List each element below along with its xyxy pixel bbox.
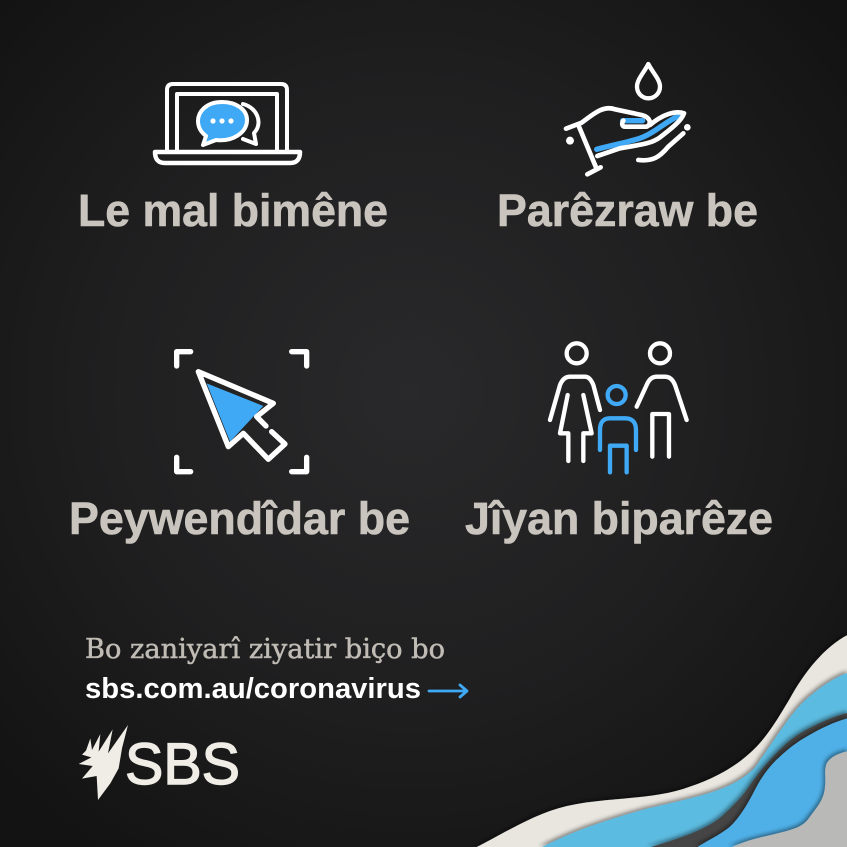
heading: Peywendîdar be: Peywendîdar be (69, 493, 410, 544)
icon: hand under water drop (566, 64, 691, 174)
logo: SBS (79, 725, 240, 800)
heading: Parêzraw be: Parêzraw be (497, 185, 758, 236)
heading: Le mal bimêne: Le mal bimêne (78, 185, 388, 236)
logo: SBS: SBS (125, 732, 240, 797)
icon: cursor arrow in focus frame (177, 352, 307, 472)
icon: family of three (550, 343, 687, 472)
text: website link: sbs.com.au/coronavirus (85, 673, 421, 705)
icon: laptop with chat bubbles (155, 84, 300, 163)
arrow: pointing right (429, 685, 467, 697)
text: more information line: Bo zaniyarî ziyatir biço bo (85, 634, 445, 665)
heading: Jîyan biparêze: Jîyan biparêze (465, 493, 773, 544)
decorative layered paper waves (475, 634, 847, 847)
